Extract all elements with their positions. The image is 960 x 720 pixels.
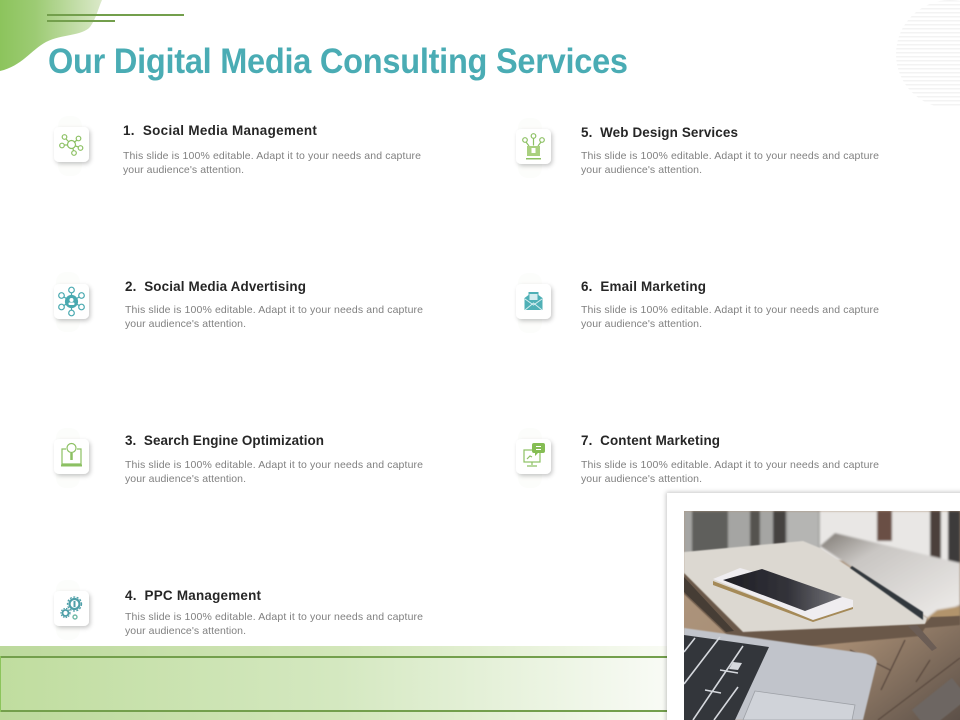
description <box>125 304 423 330</box>
service 6: Email Marketing <box>516 273 879 333</box>
service 3: Search Engine Optimization <box>54 428 423 488</box>
description <box>125 611 423 637</box>
description: This slide is 100% editable. Adapt it to your needs and capture <box>581 304 879 316</box>
description <box>581 150 879 176</box>
icon: gears <box>54 580 89 640</box>
description: your audience's attention. <box>581 318 702 330</box>
service 5: Web Design Services <box>516 118 879 178</box>
bottom gradient band <box>0 646 680 720</box>
title: Our Digital Media Consulting Services <box>48 42 628 81</box>
description: your audience's attention. <box>123 164 244 176</box>
icon: monitor with chat bubble <box>516 428 551 488</box>
description <box>125 459 423 485</box>
service 1: Social Media Management <box>54 116 421 176</box>
icon: web design box with nodes <box>516 118 551 178</box>
description: your audience's attention. <box>125 318 246 330</box>
photo scene <box>684 511 960 720</box>
description: your audience's attention. <box>581 164 702 176</box>
photo panel: desk with phone, notebook and laptop <box>667 493 960 720</box>
heading: 7. Content Marketing <box>581 433 720 448</box>
icon: laptop with magnifier <box>54 428 89 488</box>
icon: person network <box>54 272 89 332</box>
striped circle, top right <box>896 0 960 108</box>
description <box>123 150 421 176</box>
description: your audience's attention. <box>581 473 702 485</box>
heading: 4. PPC Management <box>125 588 261 603</box>
description <box>581 304 879 330</box>
description: This slide is 100% editable. Adapt it to your needs and capture <box>125 611 423 623</box>
description: This slide is 100% editable. Adapt it to your needs and capture <box>123 150 421 162</box>
description <box>581 459 879 485</box>
heading: 3. Search Engine Optimization <box>125 433 324 448</box>
description: This slide is 100% editable. Adapt it to your needs and capture <box>125 459 423 471</box>
icon: network nodes <box>54 116 89 176</box>
description: your audience's attention. <box>125 473 246 485</box>
description: This slide is 100% editable. Adapt it to your needs and capture <box>125 304 423 316</box>
description: your audience's attention. <box>125 625 246 637</box>
heading: 6. Email Marketing <box>581 279 706 294</box>
description: This slide is 100% editable. Adapt it to your needs and capture <box>581 459 879 471</box>
heading: 1. Social Media Management <box>123 123 317 138</box>
photo frame <box>667 493 960 720</box>
heading: 5. Web Design Services <box>581 125 738 140</box>
top-left green blob <box>0 0 102 71</box>
header accent lines <box>47 14 184 22</box>
description: This slide is 100% editable. Adapt it to your needs and capture <box>581 150 879 162</box>
service 2: Social Media Advertising <box>54 272 423 332</box>
icon: open envelope <box>516 273 551 333</box>
service 4: PPC Management <box>54 580 423 640</box>
service 7: Content Marketing <box>516 428 879 488</box>
heading: 2. Social Media Advertising <box>125 279 306 294</box>
